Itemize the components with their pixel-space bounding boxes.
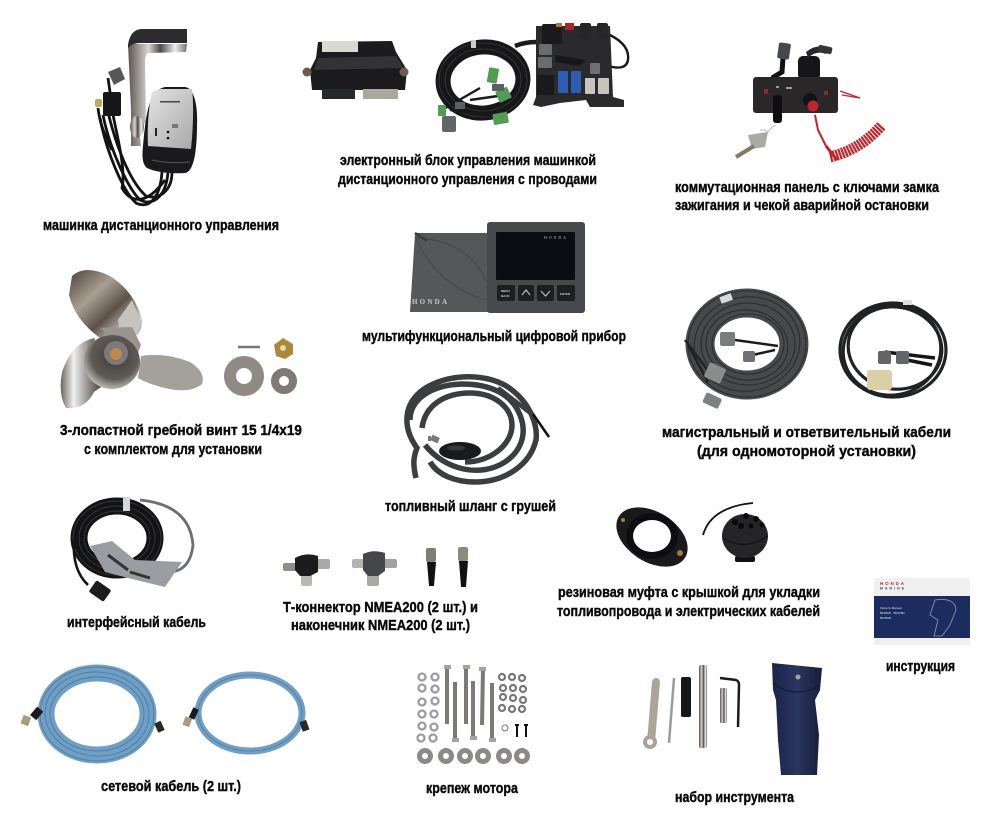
panel: switch panel (675, 42, 940, 214)
label: network cables: сетевой кабель (2 шт.) (101, 778, 241, 795)
icon: branch cable coil (835, 296, 949, 404)
icon: remote control lever (95, 29, 197, 205)
icon: multifunction display: ENTER (560, 292, 571, 296)
icon: multifunction display: HONDA (544, 235, 566, 240)
panel: owner manual (874, 578, 970, 675)
panel: network cables (21, 667, 309, 795)
icon: manual booklet (874, 578, 970, 645)
panel: NMEA connectors (283, 547, 478, 634)
label: connectors line 2: наконечник NMEA200 (2 шт.) (291, 617, 470, 634)
panel: interface cable (67, 497, 206, 631)
icon: fuel hose with primer bulb (407, 377, 549, 482)
icon: wiring harness and fuse box (438, 23, 628, 132)
icon: wrench, screwdriver, socket, hex key (645, 665, 739, 748)
icon: control unit box (302, 41, 408, 99)
label: remote control: машинка дистанционного управления (43, 217, 279, 234)
icon: rubber mount ring (606, 495, 698, 579)
icon: first network cable coil (21, 667, 165, 761)
label: fasteners: крепеж мотора (426, 780, 519, 797)
label: switch panel line 2: зажигания и чекой аварийной остановки (675, 197, 929, 214)
label: tool kit: набор инструмента (675, 789, 795, 806)
label: control unit line 1: электронный блок управления машинкой (340, 152, 596, 169)
icon: tool bag (772, 663, 822, 775)
label: switch panel line 1: коммутационная панель с ключами замка (675, 179, 940, 196)
icon: three-blade propeller (61, 270, 203, 408)
icon: bolts, nuts and washers (418, 665, 528, 762)
icon: multifunction display: MENU (501, 289, 510, 293)
label: control unit line 2: дистанционного управления с проводами (338, 171, 597, 188)
panel: tool kit (645, 663, 822, 806)
icon: interface cable coil (73, 497, 193, 602)
icon: manual booklet: Owner's Manual (880, 606, 902, 610)
icon: installation kit (230, 338, 293, 390)
panel: propeller (60, 270, 302, 458)
label: propeller line 1: 3-лопастной гребной винт 15 1/4x19 (60, 422, 302, 439)
label: cables line 1: магистральный и ответвительный кабели (662, 424, 951, 441)
panel: electronic control unit (302, 23, 628, 188)
icon: switch panel with keys and stop lanyard (736, 42, 882, 160)
label: digital display: мультифункциональный цифровой прибор (362, 328, 626, 345)
panel: main and branch cables (662, 289, 951, 460)
icon: manual booklet: BF250D (880, 616, 892, 620)
icon: T-connectors and terminators (283, 547, 468, 587)
label: interface cable: интерфейсный кабель (67, 614, 206, 631)
icon: multifunction display (410, 222, 585, 313)
panel: fuel hose (385, 377, 556, 515)
icon: second network cable coil (182, 675, 309, 751)
icon: multifunction display: BACK (501, 294, 510, 298)
icon: rubber plug with holes (703, 503, 768, 562)
panel: remote control (43, 29, 279, 234)
label: cables line 2: (для одномоторной установки) (697, 443, 916, 460)
icon: manual booklet: HONDA (880, 581, 905, 586)
icon: manual booklet: BF200D · BF225D · (880, 611, 907, 615)
label: grommet line 2: топливопровода и электрических кабелей (557, 603, 820, 620)
label: connectors line 1: Т-коннектор NMEA200 (2 шт.) и (283, 599, 478, 616)
label: fuel hose: топливный шланг с грушей (385, 498, 556, 515)
panel: rubber grommet (557, 495, 820, 620)
label: grommet line 1: резиновая муфта с крышкой для укладки (558, 584, 820, 601)
label: propeller line 2: с комплектом для установки (84, 441, 262, 458)
icon: main cable coil (685, 289, 807, 409)
panel: digital display (362, 222, 626, 345)
icon: manual booklet: MARINE (880, 586, 905, 590)
panel: motor fasteners (418, 665, 528, 797)
icon: multifunction display: HONDA (412, 298, 447, 306)
label: manual: инструкция (886, 658, 955, 675)
